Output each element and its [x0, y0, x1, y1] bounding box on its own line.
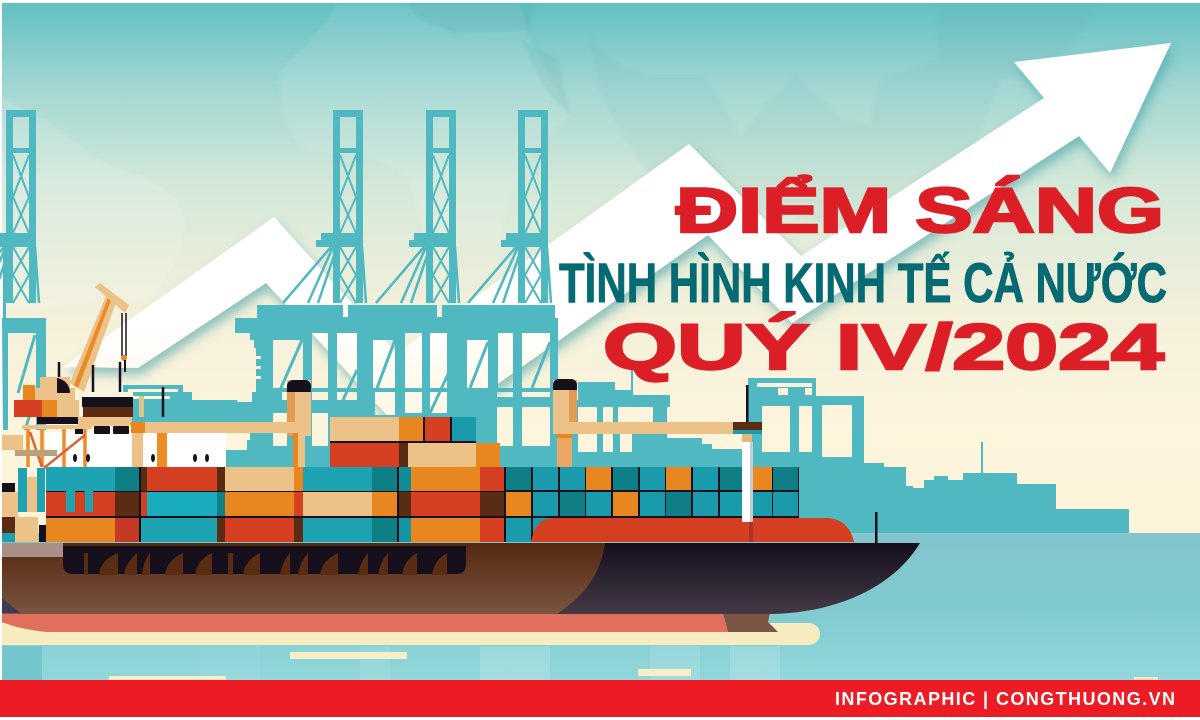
ship superstructure: [2, 377, 226, 468]
central gantry deck: [226, 305, 558, 467]
main container stack: [46, 467, 504, 542]
container ship: [2, 283, 920, 645]
forecastle: [531, 518, 854, 542]
upper containers: [330, 417, 500, 467]
cream waterline: [2, 623, 820, 645]
crane tower 1: [283, 110, 366, 303]
white rising arrow: [63, 43, 1171, 444]
bow antenna: [875, 512, 878, 543]
sky background: [2, 3, 1200, 534]
right port and skyline: [556, 370, 1129, 533]
distant structure left: [123, 385, 260, 425]
rudder: [723, 613, 778, 632]
stern building: [2, 468, 46, 542]
port cranes: [0, 110, 1129, 533]
brown hull: [2, 543, 605, 614]
water reflections: [2, 646, 1158, 680]
title line 3: QUÝ IV/2024: [603, 311, 1165, 383]
title: [559, 175, 1167, 383]
stern shadow: [2, 598, 20, 613]
arm and stack forward: [553, 379, 762, 542]
sea: [2, 533, 1200, 680]
hull band cutouts: [84, 553, 447, 575]
world map silhouette: [0, 3, 1100, 310]
left crane legs: [2, 233, 46, 430]
hull stern plate: [2, 543, 63, 557]
dark hull band: [63, 546, 466, 574]
footer bar: [0, 680, 1200, 717]
left crane brace: [18, 335, 36, 430]
title line 1: ĐIỂM SÁNG: [676, 175, 1164, 246]
crane tower 2: [376, 110, 459, 303]
red underwater hull: [2, 613, 728, 632]
forward container grid: [504, 467, 799, 542]
crane tower left: [0, 110, 39, 303]
ship crane boom: [59, 283, 163, 417]
dark bow hull: [500, 543, 920, 614]
crane tower 3: [468, 110, 551, 303]
arm and stack aft: [131, 380, 311, 467]
gantry diagonal braces: [280, 340, 550, 413]
footer credit: INFOGRAPHIC | CONGTHUONG.VN: [835, 689, 1175, 709]
